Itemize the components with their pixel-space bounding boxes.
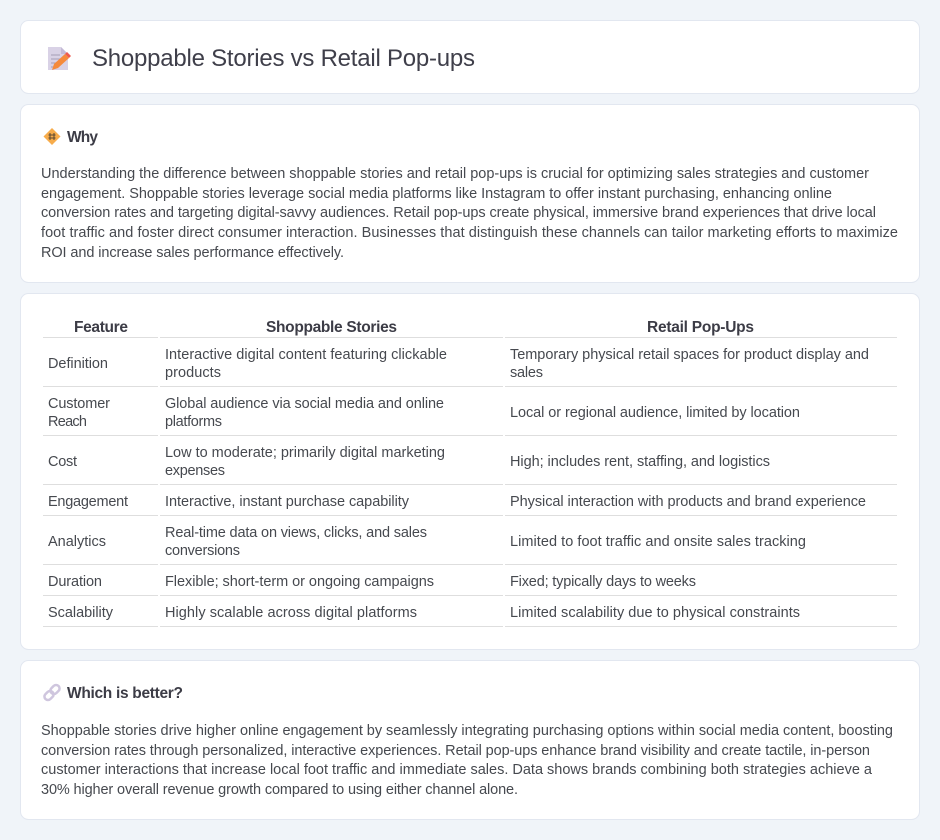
text block: why paragraph: ROI and increase sales performance effectively. bbox=[41, 245, 344, 261]
row: customer reach: platforms bbox=[165, 414, 222, 430]
row: engagement: Physical interaction with products and brand experience bbox=[510, 494, 866, 510]
row: engagement bbox=[48, 494, 866, 510]
row: analytics: Analytics bbox=[48, 534, 106, 550]
icon: document with pencil bbox=[48, 47, 71, 70]
text block: why paragraph: Understanding the difference between shoppable stories and retail pop-ups is crucial for optimizing sales strategies and customer bbox=[41, 166, 869, 182]
row: analytics bbox=[48, 525, 806, 559]
heading: which is better: Which is better? bbox=[67, 685, 183, 702]
text block: which is better paragraph bbox=[41, 723, 893, 798]
row: definition: Definition bbox=[48, 356, 108, 372]
text block: why paragraph bbox=[41, 166, 898, 261]
text block: which is better paragraph: 30% higher overall revenue growth compared to using either channel alone. bbox=[41, 782, 518, 798]
panel: why bbox=[20, 104, 920, 282]
text block: why paragraph: conversion rates and targeting digital-savvy audiences. Retail pop-ups create physical, immersive brand experiences that drive local bbox=[41, 205, 876, 221]
row: duration: Flexible; short-term or ongoing campaigns bbox=[165, 574, 434, 590]
row: definition: products bbox=[165, 365, 221, 381]
row: definition bbox=[48, 347, 869, 381]
row: analytics: Real-time data on views, clicks, and sales bbox=[165, 525, 427, 541]
row: definition: Temporary physical retail spaces for product display and bbox=[510, 347, 869, 363]
row: scalability: Highly scalable across digital platforms bbox=[165, 605, 417, 621]
row: cost: expenses bbox=[165, 463, 225, 479]
row: customer reach: Local or regional audience, limited by location bbox=[510, 405, 800, 421]
table header row bbox=[74, 319, 754, 336]
row: duration bbox=[48, 574, 696, 590]
row: definition: sales bbox=[510, 365, 543, 381]
icon: diamond sign bbox=[44, 128, 60, 145]
row: duration: Duration bbox=[48, 574, 102, 590]
row: customer reach: Customer bbox=[48, 396, 110, 412]
text block: why paragraph: engagement. Shoppable stories leverage social media platforms like Instagram to offer instant purchasing, enhancing online bbox=[41, 186, 832, 202]
row: customer reach bbox=[48, 396, 800, 430]
row: cost: Cost bbox=[48, 454, 77, 470]
text block: which is better paragraph: Shoppable stories drive higher online engagement by seamlessly integrating purchasing options within social media content, boosting bbox=[41, 723, 893, 739]
row: scalability bbox=[48, 605, 800, 621]
table header row: Feature bbox=[74, 319, 128, 336]
row: cost bbox=[48, 445, 770, 479]
text block: which is better paragraph: conversion rates through personalized, interactive experiences. Retail pop-ups enhance brand visibility and create tactile, in-person bbox=[41, 743, 870, 759]
row: engagement: Interactive, instant purchase capability bbox=[165, 494, 410, 510]
row: scalability: Scalability bbox=[48, 605, 114, 621]
row: duration: Fixed; typically days to weeks bbox=[510, 574, 696, 590]
row: definition: Interactive digital content featuring clickable bbox=[165, 347, 447, 363]
row: scalability: Limited scalability due to physical constraints bbox=[510, 605, 800, 621]
panel: which is better bbox=[20, 660, 920, 820]
title: Shoppable Stories vs Retail Pop-ups bbox=[92, 45, 475, 72]
row: cost: High; includes rent, staffing, and logistics bbox=[510, 454, 770, 470]
table header row: Shoppable Stories bbox=[266, 319, 397, 336]
panel: comparison table bbox=[20, 294, 920, 650]
panel: title header bbox=[20, 20, 920, 94]
table header row: Retail Pop-Ups bbox=[647, 319, 754, 336]
row: analytics: conversions bbox=[165, 543, 240, 559]
heading: why: Why bbox=[67, 129, 98, 146]
row: analytics: Limited to foot traffic and onsite sales tracking bbox=[510, 534, 806, 550]
icon: link bbox=[43, 683, 61, 702]
text block: which is better paragraph: customer interactions that increase local foot traffic and immediate sales. Data shows brands combining both strategies achieve a bbox=[41, 762, 873, 778]
row: cost: Low to moderate; primarily digital marketing bbox=[165, 445, 445, 461]
row: engagement: Engagement bbox=[48, 494, 128, 510]
row: customer reach: Global audience via social media and online bbox=[165, 396, 444, 412]
row: customer reach: Reach bbox=[48, 414, 87, 430]
text block: why paragraph: foot traffic and foster direct consumer interaction. Businesses that distinguish these channels can tailor marketing efforts to maximize bbox=[41, 225, 898, 241]
